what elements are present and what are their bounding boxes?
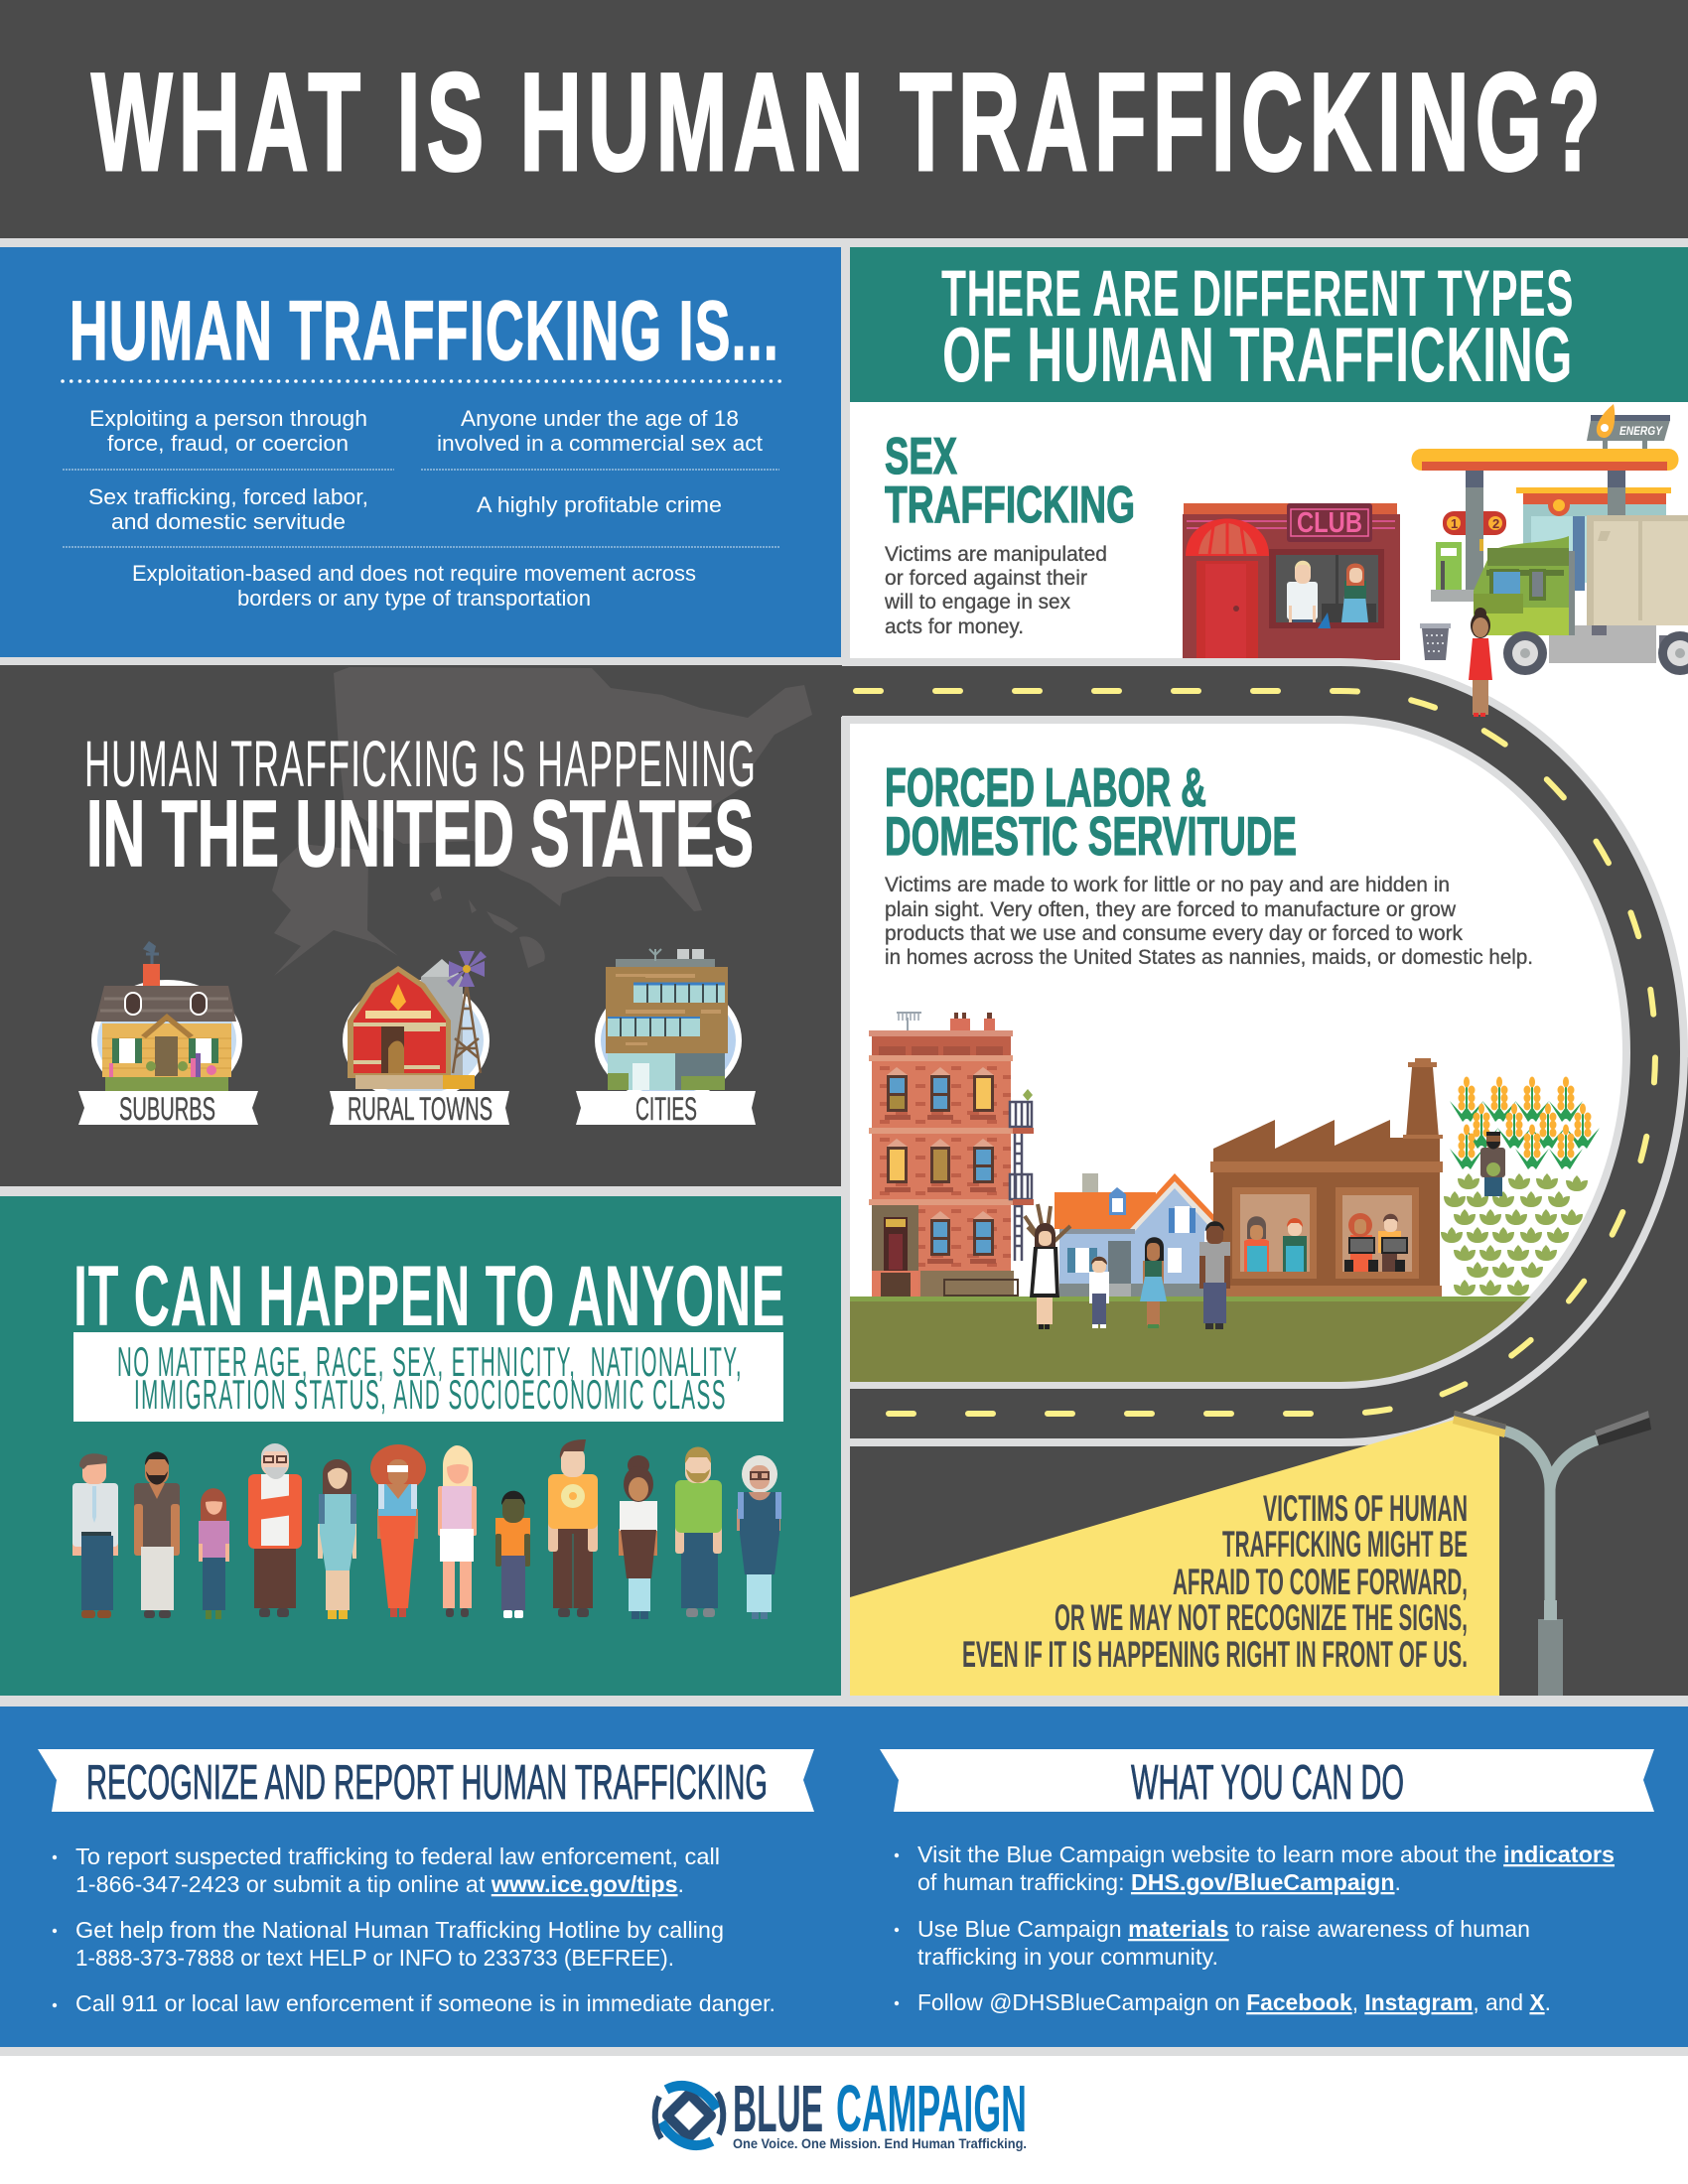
victims text: AFRAID TO COME FORWARD, (1173, 1562, 1468, 1602)
victims text: VICTIMS OF HUMAN (1263, 1488, 1468, 1529)
sex trafficking text: will to engage in sex (884, 591, 1070, 614)
logo: blue campaign: BLUE (733, 2072, 823, 2146)
illustration: blue house (1055, 1173, 1226, 1297)
icon: rural barn (346, 951, 487, 1098)
forced labor text: plain sight. Very often, they are forced to manufacture or grow (885, 898, 1457, 921)
illustration: factory (1210, 1058, 1443, 1297)
what you can do list: Use Blue Campaign materials to raise awareness of human (917, 1916, 1530, 1942)
footer white (0, 2056, 1688, 2184)
fact: exploiting (89, 406, 367, 456)
recognize list: Get help from the National Human Trafficking Hotline by calling (75, 1917, 724, 1943)
fire escape (1010, 1102, 1032, 1261)
fact: exploiting: Exploiting a person through (89, 406, 367, 431)
recognize list (53, 1843, 775, 2016)
illustration: gas station (1412, 404, 1688, 675)
panel: forced labor (850, 756, 1644, 1382)
pump signs (1443, 511, 1506, 535)
ribbon: rural towns (330, 1091, 509, 1127)
victims text: TRAFFICKING MIGHT BE (1222, 1524, 1468, 1565)
forced labor heading (885, 756, 1297, 867)
fact: exploitation: borders or any type of transportation (237, 586, 591, 611)
fact: forms: Sex trafficking, forced labor, (88, 484, 368, 509)
heading: IT CAN HAPPEN TO ANYONE (73, 1249, 785, 1344)
ribbon: rural towns: RURAL TOWNS (348, 1091, 492, 1127)
sex trafficking heading: SEX (885, 428, 957, 485)
what you can do list (895, 1842, 1615, 2015)
back store (1516, 487, 1671, 583)
illustration: man (1199, 1221, 1230, 1329)
ribbon: cities (576, 1091, 756, 1127)
tagline: One Voice. One Mission. End Human Trafficking. (733, 2135, 1027, 2151)
fact: exploiting: force, fraud, or coercion (107, 431, 349, 456)
person 8 (495, 1491, 530, 1618)
illustration: club (1183, 503, 1400, 660)
panel: human trafficking is (0, 247, 841, 657)
header band (0, 0, 1688, 238)
fact: exploitation (132, 561, 696, 611)
fact: under 18 (437, 406, 763, 456)
map of united states (272, 667, 812, 976)
illustration: club: CLUB (1297, 507, 1362, 539)
victims text (962, 1488, 1468, 1675)
what you can do list: Follow @DHSBlueCampaign on Facebook, Instagram, and X. (917, 1989, 1551, 2015)
recognize list: 1-888-373-7888 or text HELP or INFO to 233733 (BEFREE). (75, 1945, 674, 1971)
street light (1453, 1411, 1651, 1696)
person 4 (248, 1443, 302, 1617)
ribbon: cities: CITIES (635, 1091, 697, 1127)
person 9 (548, 1439, 598, 1617)
person 11 (675, 1447, 722, 1617)
subheading box: IMMIGRATION STATUS, AND SOCIOECONOMIC CLASS (134, 1371, 727, 1418)
panel: forced labor inner white shape (850, 725, 1623, 1382)
ribbon: recognize and report (38, 1749, 814, 1812)
fact: forms: and domestic servitude (111, 509, 346, 534)
what you can do list: trafficking in your community. (917, 1944, 1218, 1970)
road (842, 691, 1655, 1414)
farmer (1480, 1132, 1505, 1196)
logo: blue campaign: CAMPAIGN (836, 2072, 1027, 2146)
forced labor text: products that we use and consume every day or forced to work (885, 922, 1463, 945)
illustration: ground (850, 1297, 1531, 1382)
pump signs: 2 (1492, 516, 1499, 531)
sex trafficking text: acts for money. (885, 615, 1024, 638)
icon: suburbs house (94, 941, 239, 1098)
factory workers (1244, 1213, 1407, 1272)
person 7 (438, 1445, 477, 1617)
person 6 (370, 1444, 426, 1617)
person 3 (199, 1488, 229, 1619)
energy sign (1587, 404, 1670, 449)
subheading box: NO MATTER AGE, RACE, SEX, ETHNICITY, NATIONALITY, (117, 1338, 743, 1385)
forced labor text: Victims are made to work for little or no pay and are hidden in (885, 874, 1450, 896)
illustration: corn field (1441, 1076, 1600, 1296)
subheading box (73, 1332, 783, 1422)
ribbon: what you can do: WHAT YOU CAN DO (1131, 1756, 1404, 1810)
fact: under 18: involved in a commercial sex act (437, 431, 763, 456)
man in window (1287, 561, 1318, 622)
woman on road (1469, 608, 1492, 717)
truck (1474, 515, 1688, 675)
panel: it can happen to anyone (0, 1196, 841, 1696)
fact: profitable: A highly profitable crime (477, 492, 722, 517)
person 10 (619, 1455, 657, 1619)
sex trafficking text: or forced against their (885, 567, 1087, 590)
icon: logo ring (655, 2086, 723, 2145)
heading line 1: HUMAN TRAFFICKING IS HAPPENING (84, 727, 757, 800)
panel: bottom blue (0, 1706, 1688, 2047)
person 1 (72, 1453, 118, 1618)
icon: city building (598, 949, 739, 1098)
ribbon: recognize and report: RECOGNIZE AND REPORT HUMAN TRAFFICKING (86, 1756, 768, 1810)
forced labor heading: DOMESTIC SERVITUDE (885, 805, 1297, 867)
what you can do list: Visit the Blue Campaign website to learn more about the indicators (917, 1842, 1615, 1867)
woman in window (1341, 564, 1368, 622)
forced labor heading: FORCED LABOR & (885, 756, 1206, 818)
fact: exploitation: Exploitation-based and does not require movement across (132, 561, 696, 586)
sex trafficking text (884, 543, 1107, 638)
forced labor text (885, 874, 1533, 969)
recognize list: To report suspected trafficking to federal law enforcement, call (75, 1843, 720, 1869)
panel: sex trafficking (884, 404, 1688, 675)
trash can (1420, 623, 1451, 660)
sex trafficking heading (885, 428, 1135, 534)
fact: under 18: Anyone under the age of 18 (461, 406, 739, 431)
recognize list: Call 911 or local law enforcement if someone is in immediate danger. (75, 1990, 775, 2016)
panel heading: HUMAN TRAFFICKING IS... (70, 284, 779, 377)
what you can do list: of human trafficking: DHS.gov/BlueCampaign. (917, 1869, 1401, 1895)
recognize list: 1-866-347-2423 or submit a tip online at www.ice.gov/tips. (75, 1871, 684, 1897)
illustration: woman in apron (1025, 1204, 1070, 1329)
heading line 2: IN THE UNITED STATES (86, 781, 754, 887)
pump signs: 1 (1451, 516, 1458, 531)
ribbon: suburbs: SUBURBS (119, 1091, 215, 1127)
illustration: brownstone (869, 1013, 1034, 1297)
panel: different types heading (850, 247, 1688, 402)
illustration: girl (1140, 1237, 1167, 1328)
panel: white background for trafficking types (850, 402, 1688, 1057)
person 2 (134, 1451, 180, 1618)
panel: lower right dark (850, 1057, 1688, 1696)
sex trafficking text: Victims are manipulated (885, 543, 1107, 566)
panel: in the united states (0, 665, 850, 1186)
fact: forms (88, 484, 368, 534)
sex trafficking heading: TRAFFICKING (885, 477, 1135, 534)
person 12 (737, 1455, 781, 1619)
illustration: boy (1089, 1257, 1109, 1328)
ribbon: what you can do (880, 1749, 1654, 1812)
energy sign: ENERGY (1619, 424, 1663, 438)
person 5 (318, 1459, 356, 1619)
logo: blue campaign (655, 2072, 1027, 2151)
panel: yellow light beam (850, 1420, 1499, 1696)
forced labor text: in homes across the United States as nannies, maids, or domestic help. (885, 946, 1533, 969)
